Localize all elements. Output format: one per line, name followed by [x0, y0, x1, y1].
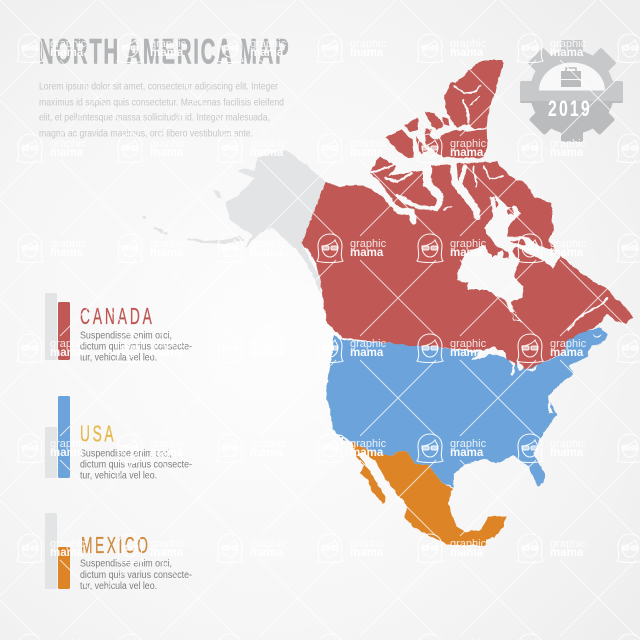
region: Alaska [142, 150, 325, 293]
region: Mexico [352, 442, 507, 547]
text [80, 330, 192, 364]
heading: CANADA [80, 305, 155, 330]
heading: MEXICO [81, 534, 151, 559]
gear shape [520, 40, 623, 142]
intro text block: magna ac gravida maximus, orci libero vestibulum ante. [39, 128, 253, 140]
bars [45, 396, 70, 478]
text: dictum quis varius consecte- [80, 460, 192, 470]
text [80, 448, 192, 482]
text: Suspendisse enim orci, [80, 558, 172, 570]
text [80, 558, 192, 592]
Foxe Basin and Hudson Strait [483, 197, 560, 268]
intro text block [39, 82, 284, 140]
year: 2019 [548, 98, 592, 122]
Canadian islands in Hudson Bay [491, 197, 528, 321]
heading: USA [80, 422, 116, 448]
text: Suspendisse enim orci, [80, 448, 172, 460]
intro text block: elit, et pellentesque massa sollicitudin id. Integer malesuada, [39, 112, 270, 124]
Great Lakes and gulf details [472, 333, 602, 414]
channels, Hudson Bay and lakes [370, 85, 607, 330]
text: Suspendisse enim orci, [80, 330, 172, 342]
map of North America [142, 60, 633, 547]
Arctic channels [370, 85, 607, 330]
mainland and Baffin [302, 156, 633, 370]
bars [45, 293, 70, 360]
icon: briefcase [561, 68, 581, 87]
panel: Canada [45, 293, 192, 364]
region: Canada [302, 60, 633, 370]
title: NORTH AMERICA MAP [39, 33, 290, 72]
text: tur, vehicula vel leo. [80, 352, 157, 364]
Ellesmere island [444, 60, 503, 129]
badge: gear 2019 [520, 40, 623, 142]
text: tur, vehicula vel leo. [80, 470, 157, 482]
intro text block: maximus id sapien quis consectetur. Maecenas facilisis eleifend [39, 98, 284, 108]
bars [45, 513, 70, 589]
gear lower half [520, 101, 623, 142]
text: dictum quis varius consecte- [80, 570, 192, 581]
Hudson Bay [457, 245, 523, 323]
panel: USA [45, 396, 192, 482]
intro text block: Lorem ipsum dolor sit amet, consectetur adipiscing elit. Integer [39, 82, 279, 92]
region: USA [326, 328, 608, 487]
white dome [539, 62, 605, 90]
text: dictum quis varius consecte- [80, 342, 192, 352]
text: tur, vehicula vel leo. [80, 581, 157, 592]
Arctic islands [425, 112, 444, 130]
panel: Mexico [45, 513, 192, 592]
